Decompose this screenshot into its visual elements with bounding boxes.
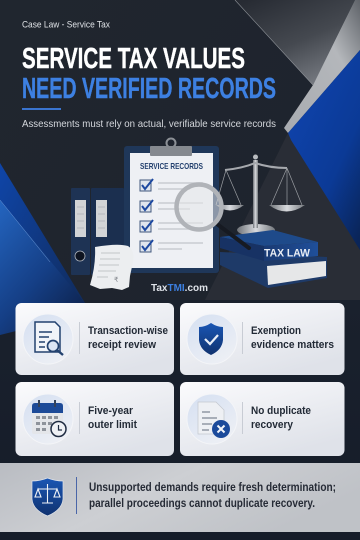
checklist — [140, 179, 203, 252]
icon: document with magnifier — [35, 322, 63, 355]
icon: document with cross — [198, 402, 230, 438]
card text: recovery — [251, 419, 294, 431]
title: SERVICE TAX VALUES — [22, 43, 245, 75]
panel: conclusion banner — [0, 463, 360, 532]
icon: shield with check — [199, 323, 223, 355]
conclusion text: parallel proceedings cannot duplicate recovery. — [89, 498, 315, 510]
card text — [88, 325, 168, 351]
accent rule — [22, 108, 61, 110]
card text: evidence matters — [251, 339, 334, 351]
card text: outer limit — [88, 419, 137, 431]
illustration: binders — [71, 188, 124, 275]
book title: TAX LAW — [264, 248, 311, 260]
panel: five-year outer limit — [16, 382, 174, 456]
panel: transaction-wise receipt review — [16, 303, 174, 375]
subtitle: Assessments must rely on actual, verifiable service records — [22, 118, 276, 130]
card text — [251, 325, 334, 351]
brand: TaxTMI.com — [151, 282, 208, 294]
clipboard heading: SERVICE RECORDS — [140, 161, 203, 171]
illustration: magnifying glass — [176, 184, 249, 248]
conclusion text — [89, 482, 336, 510]
illustration: receipt: ₹ — [114, 276, 119, 284]
panel: no duplicate recovery — [180, 382, 344, 456]
icon: calendar with clock — [32, 400, 66, 436]
card text — [88, 405, 137, 431]
card text: Exemption — [251, 325, 301, 337]
illustration: receipt — [90, 245, 133, 290]
header eyebrow: Case Law - Service Tax — [22, 20, 110, 30]
illustration: law books — [220, 230, 327, 288]
panel: exemption evidence matters — [180, 303, 344, 375]
card text: Five-year — [88, 405, 134, 417]
title — [22, 43, 276, 105]
card text: receipt review — [88, 339, 156, 351]
card text: No duplicate — [251, 405, 311, 417]
card text: Transaction-wise — [88, 325, 168, 337]
card text — [251, 405, 311, 431]
illustration: clipboard — [124, 138, 219, 273]
illustration: scales of justice — [216, 154, 305, 236]
icon: shield with scales — [32, 478, 63, 516]
